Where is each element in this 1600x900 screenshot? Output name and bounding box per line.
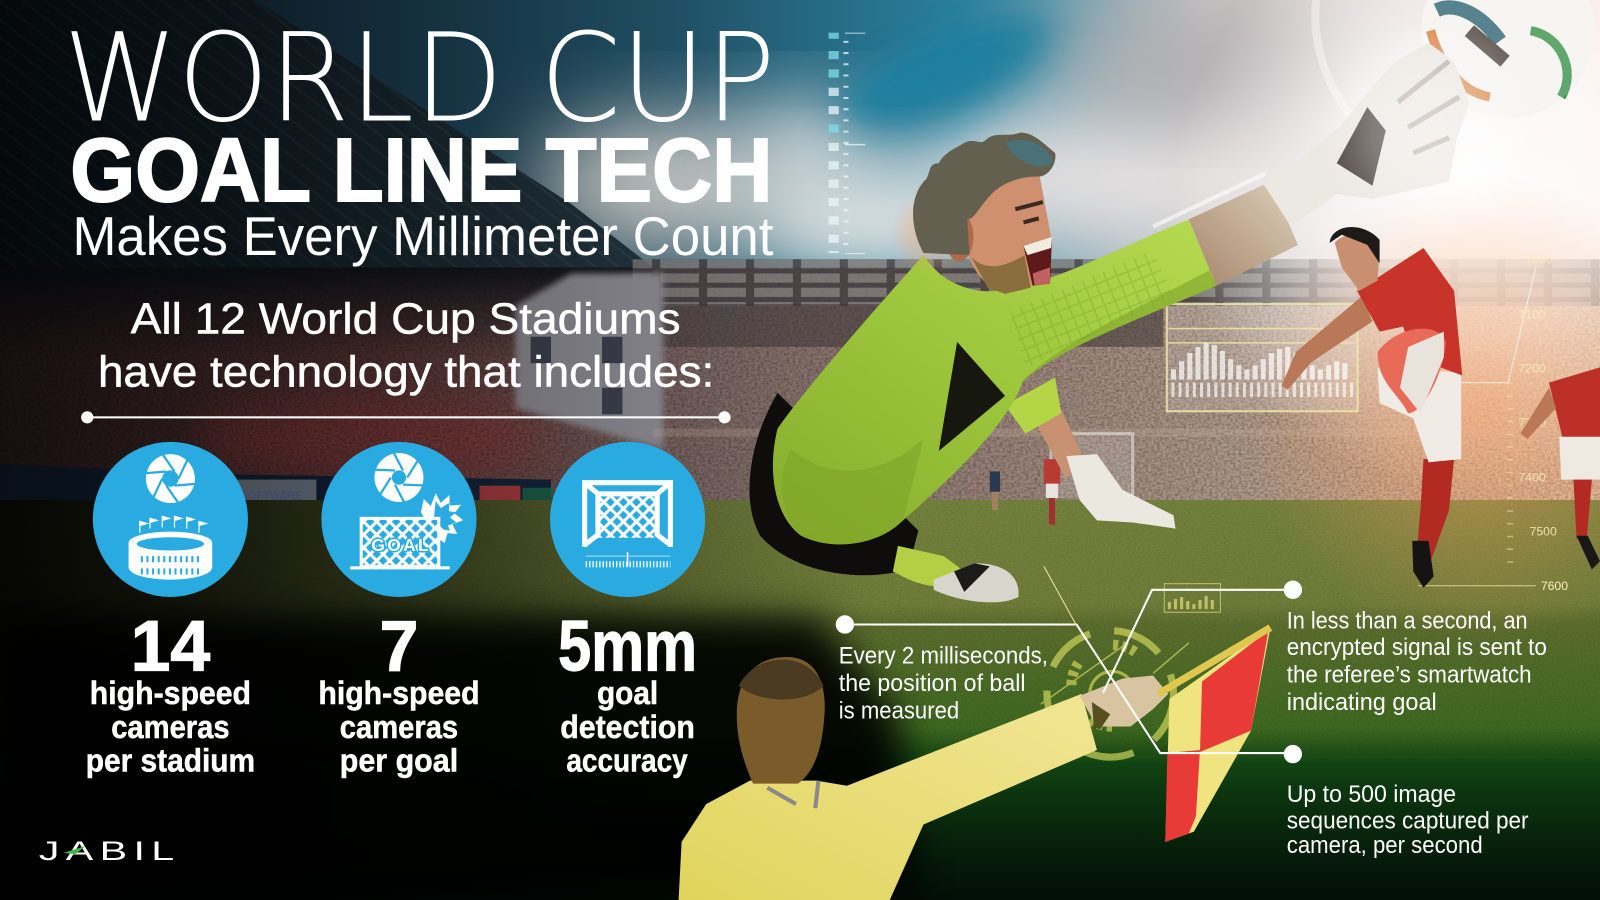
stat label: per stadium	[86, 741, 255, 778]
referee hand and watch	[1080, 676, 1168, 727]
background: sky and clouds	[0, 0, 1600, 286]
callout: every 2 milliseconds: Every 2 milliseconds,	[839, 642, 1048, 669]
stat panel: cameras per stadium	[86, 442, 260, 778]
logo: Jabil: JABIL	[39, 836, 181, 866]
player standing leg and boot	[1416, 459, 1454, 561]
flag pole	[1158, 628, 1270, 694]
stat label: cameras	[111, 708, 230, 745]
callout: every 2 milliseconds: the position of ball	[839, 670, 1026, 697]
keeper leg and boot	[893, 546, 964, 587]
HUD: right-hand measurement scale: 7400	[1518, 471, 1546, 485]
icon: goal with camera flash: GOAL	[371, 535, 429, 555]
HUD: right-hand measurement scale: 7300	[1518, 416, 1546, 430]
HUD: right-hand measurement scale: 7000	[1526, 252, 1553, 266]
keeper lower arm and glove	[1031, 398, 1082, 480]
callout: encrypted signal: indicating goal	[1287, 689, 1437, 716]
HUD: right-hand measurement scale: 7600	[1541, 579, 1568, 593]
icon: goal frame with ruler	[550, 442, 705, 597]
subtitle: Makes Every Millimeter Count	[72, 205, 773, 267]
title: goal line tech: GOAL LINE TECH	[70, 121, 772, 221]
stat label: accuracy	[566, 741, 688, 778]
HUD: ring around ball	[1315, 0, 1359, 124]
keeper ear	[945, 212, 973, 261]
top right light glow	[1173, 0, 1600, 643]
stat number: 14	[131, 606, 210, 686]
divider line with end dots	[81, 411, 731, 423]
stat label: high-speed	[90, 674, 251, 711]
flag	[1158, 628, 1270, 842]
keeper glove	[1263, 43, 1469, 227]
keeper head	[890, 133, 1055, 294]
callout: encrypted signal: encrypted signal is sent to	[1287, 634, 1547, 661]
flag red bottom panel	[1165, 750, 1200, 842]
callout: encrypted signal: In less than a second, an	[1287, 608, 1528, 635]
keeper beard	[971, 255, 1031, 294]
callout: every 2 milliseconds: is measured	[839, 697, 959, 724]
HUD: right-hand measurement scale: 7100	[1518, 307, 1546, 321]
keeper eyes	[1015, 202, 1043, 222]
jersey black panel	[939, 342, 1005, 451]
stat label: per goal	[340, 741, 458, 778]
intro text: have technology that includes:	[98, 348, 714, 397]
HUD: right-hand measurement scale: 7500	[1530, 525, 1557, 539]
keeper hair	[913, 133, 1055, 255]
stat number: 5mm	[558, 606, 697, 686]
player shorts	[1378, 367, 1461, 462]
background: pitch	[0, 500, 1600, 900]
goalkeeper	[749, 0, 1595, 602]
background stadium text board: SOFTWARE	[241, 488, 302, 503]
callout connector lines	[836, 566, 1302, 763]
callout: encrypted signal: the referee’s smartwatch	[1287, 662, 1532, 689]
icon: goal with camera flash	[321, 442, 477, 597]
referee collar marks	[767, 781, 818, 808]
callout: image sequences: sequences captured per	[1287, 808, 1529, 835]
jersey shaded folds	[782, 270, 1216, 544]
flag red top panel	[1200, 631, 1268, 752]
keeper forearm	[1189, 182, 1298, 286]
callout: image sequences: Up to 500 image	[1287, 781, 1456, 808]
player head	[1335, 235, 1380, 291]
background: stadium stands	[0, 0, 1600, 505]
stat label: cameras	[340, 708, 458, 745]
HUD: vertical measurement ticks	[829, 33, 865, 254]
stat label: detection	[560, 708, 695, 745]
player arm	[1282, 296, 1372, 390]
stat panel: detection accuracy	[550, 442, 705, 778]
stat label: high-speed	[318, 674, 480, 711]
jersey quilted shoulder	[1010, 250, 1173, 369]
HUD: small chart	[1164, 584, 1220, 612]
red kicking player	[1282, 227, 1462, 588]
logo: Jabil	[39, 836, 181, 866]
HUD: right-hand measurement scale	[1418, 252, 1568, 593]
icon: stadium with camera shutter	[93, 442, 248, 597]
stat panel: cameras per goal	[318, 442, 489, 778]
keeper mouth	[1023, 237, 1052, 286]
stat label: goal	[597, 674, 658, 711]
callout: image sequences: camera, per second	[1287, 832, 1483, 859]
stat number: 7	[380, 606, 418, 686]
intro text: All 12 World Cup Stadiums	[131, 295, 681, 344]
keeper jersey	[773, 219, 1216, 544]
ball	[1421, 0, 1595, 117]
glare over glove	[1316, 20, 1541, 245]
keeper shorts	[749, 393, 918, 575]
background players and goal	[990, 434, 1133, 524]
HUD: right-hand measurement scale: 7200	[1518, 361, 1546, 375]
referee	[679, 657, 1168, 900]
HUD: targeting circles around flag hand	[1041, 631, 1189, 757]
keeper face	[964, 176, 1051, 290]
referee body and arm	[679, 694, 1097, 900]
referee head	[737, 657, 825, 784]
right edge player	[1520, 367, 1600, 569]
title: world cup: WORLD CUP	[63, 6, 776, 149]
HUD: bar chart over stands	[1167, 304, 1358, 411]
player raised leg	[1378, 329, 1446, 413]
player shirt	[1357, 248, 1462, 376]
